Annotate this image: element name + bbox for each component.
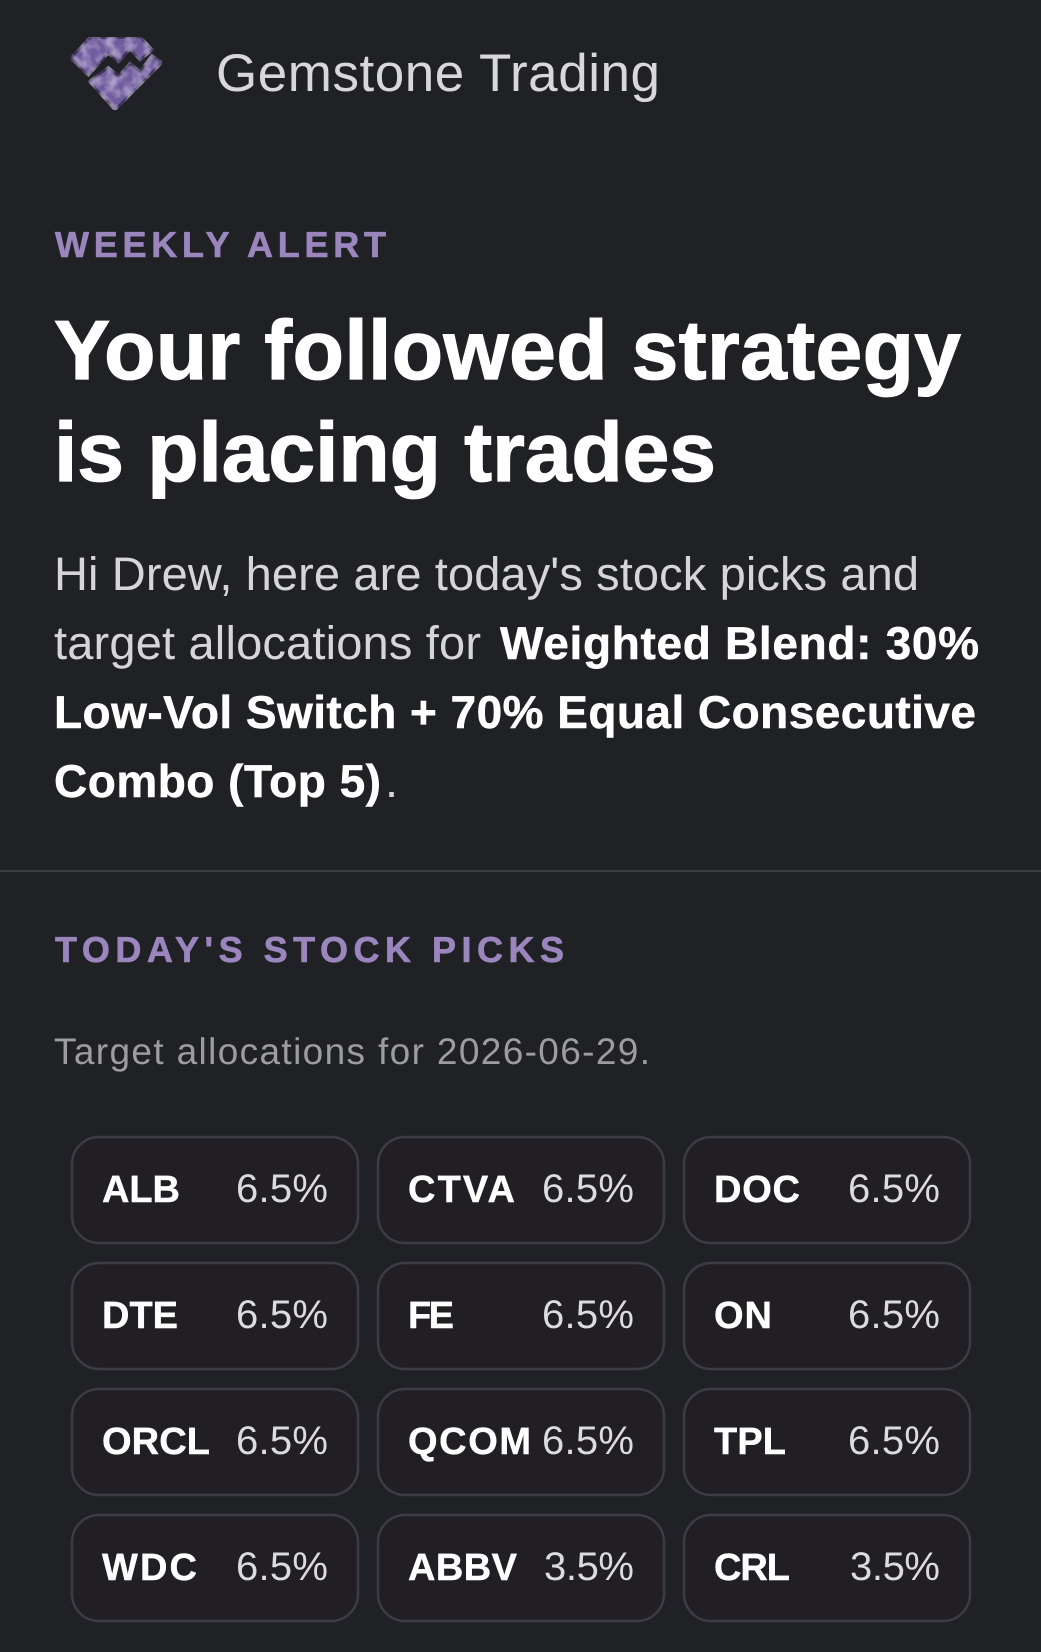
card: FE: FE [408, 1295, 454, 1337]
card: CTVA: CTVA [408, 1169, 515, 1211]
card: WDC: 6.5% [236, 1545, 328, 1589]
card: ALB: 6.5% [236, 1167, 328, 1211]
card: CRL: CRL [714, 1547, 790, 1589]
card: ALB [72, 1137, 358, 1243]
section label: today's stock picks: TODAY'S STOCK PICKS [55, 929, 564, 970]
card: ORCL: 6.5% [236, 1419, 328, 1463]
header [71, 37, 660, 110]
card: ON [684, 1263, 970, 1369]
card: ABBV: ABBV [408, 1547, 518, 1589]
card: DTE: DTE [102, 1295, 178, 1337]
main headline: is placing trades [54, 405, 716, 499]
card: QCOM: 6.5% [542, 1419, 634, 1463]
main headline [54, 303, 961, 499]
icon: purple gem logo [71, 37, 162, 110]
card: ON: 6.5% [848, 1293, 940, 1337]
intro paragraph: Combo (Top 5) [54, 755, 381, 807]
card: ALB: ALB [102, 1169, 180, 1211]
card: DOC: DOC [714, 1169, 800, 1211]
card: QCOM: QCOM [408, 1421, 531, 1463]
card: ON: ON [714, 1295, 772, 1337]
card: DTE: 6.5% [236, 1293, 328, 1337]
card: ABBV: 3.5% [544, 1545, 634, 1589]
brand name: Gemstone Trading [216, 44, 660, 103]
card: DOC: 6.5% [848, 1167, 940, 1211]
card: DOC [684, 1137, 970, 1243]
card: WDC [72, 1515, 358, 1621]
card: TPL [684, 1389, 970, 1495]
card: ORCL: ORCL [102, 1421, 210, 1463]
card: ABBV [378, 1515, 664, 1621]
card: CTVA: 6.5% [542, 1167, 634, 1211]
intro paragraph: Hi Drew, here are today's stock picks and [54, 547, 919, 600]
card: FE [378, 1263, 664, 1369]
intro paragraph: target allocations for [54, 616, 481, 669]
intro paragraph: . [385, 754, 398, 807]
card: TPL: TPL [714, 1421, 786, 1463]
card: DTE [72, 1263, 358, 1369]
card: ORCL [72, 1389, 358, 1495]
main headline: Your followed strategy [54, 303, 961, 397]
card: CRL: 3.5% [850, 1545, 940, 1589]
intro paragraph: Weighted Blend: 30% [500, 617, 979, 669]
intro paragraph [54, 547, 979, 807]
card: CRL [684, 1515, 970, 1621]
section label: weekly alert: WEEKLY ALERT [55, 224, 386, 265]
card: CTVA [378, 1137, 664, 1243]
card: WDC: WDC [102, 1547, 197, 1589]
intro paragraph: Low-Vol Switch + 70% Equal Consecutive [54, 686, 976, 738]
card: FE: 6.5% [542, 1293, 634, 1337]
target allocation date note: Target allocations for 2026-06-29. [54, 1031, 650, 1072]
stock picks grid [72, 1137, 970, 1621]
card: QCOM [378, 1389, 664, 1495]
card: TPL: 6.5% [848, 1419, 940, 1463]
